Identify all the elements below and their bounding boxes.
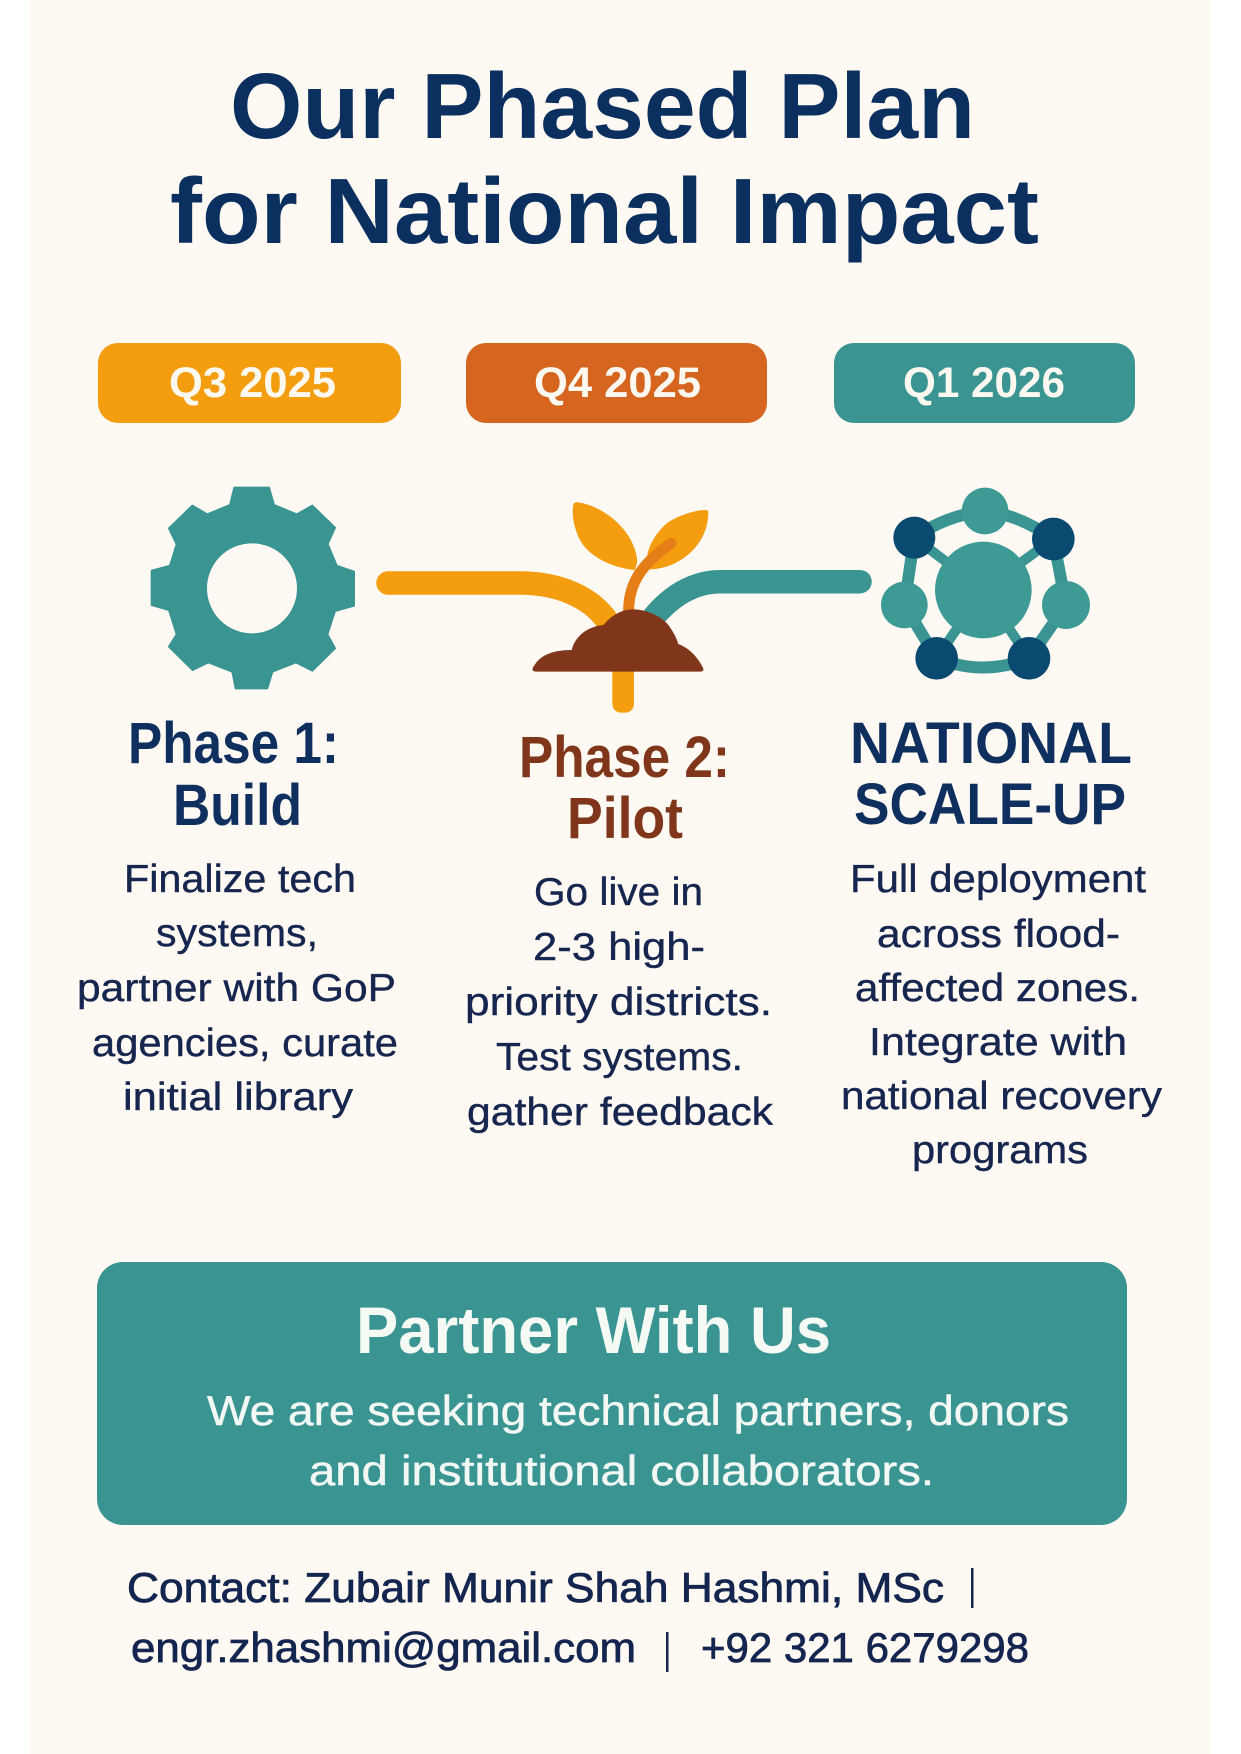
title: for National Impact [170,159,1039,263]
text: Phase 2 description: Go live in [534,871,703,914]
text: National scale-up description: affected zones. [855,967,1140,1010]
heading: Phase 2 Pilot: Phase 2: [519,725,730,790]
icon: gear [152,488,354,688]
badge: Q3 2025 [98,343,401,423]
text: Phase 2 description: gather feedback [467,1091,774,1134]
text: National scale-up description: programs [912,1129,1088,1172]
text: Phase 1 description: systems, [156,912,318,955]
text: Phase 2 description: Test systems. [496,1036,743,1079]
text: National scale-up description: Full deployment [850,858,1146,901]
text: Phase 1 description: initial library [123,1076,354,1119]
heading: Phase 1 Build [128,711,339,838]
heading: National Scale-up: NATIONAL [850,711,1132,776]
heading: Phase 1 Build: Build [173,773,302,838]
badge: Q1 2026 [834,343,1135,423]
text: Phase 2 description [465,871,774,1134]
text: Phase 1 description: agencies, curate [92,1022,398,1065]
heading: Phase 2 Pilot [519,725,730,851]
text: contact details: +92 321 6279298 [701,1624,1029,1671]
text: Phase 2 description: 2-3 high- [533,926,705,969]
text: Phase 1 description [77,858,398,1119]
text: contact details: Contact: Zubair Munir Shah Hashmi, MSc [127,1564,944,1611]
text: National scale-up description: Integrate with [869,1021,1127,1064]
text: partner message: and institutional collaborators. [309,1447,934,1494]
icon: network [881,488,1090,680]
text: partner message [207,1387,1069,1494]
arrow: teal connector from sprout to network [653,582,860,618]
heading: Phase 1 Build: Phase 1: [128,711,339,776]
badge: Q4 2025 [466,343,767,423]
text: National scale-up description: across flood- [877,913,1120,956]
panel: partner with us [97,1262,1127,1525]
badge: Q4 2025: Q4 2025 [534,359,701,407]
title: Our Phased Plan [230,54,975,158]
heading: partner with us: Partner With Us [356,1293,831,1367]
icon: sprout [532,502,708,713]
arrow: orange connector from gear to sprout [388,583,608,622]
text: partner message: We are seeking technical partners, donors [207,1387,1069,1434]
title [170,54,1039,263]
heading: National Scale-up [850,711,1132,837]
text: Phase 1 description: partner with GoP [77,967,396,1010]
text: National scale-up description [841,858,1163,1172]
heading: National Scale-up: SCALE-UP [854,772,1126,837]
text: contact details: engr.zhashmi@gmail.com [131,1624,636,1671]
text: Phase 2 description: priority districts. [465,981,772,1024]
text: National scale-up description: national recovery [841,1075,1163,1118]
heading: Phase 2 Pilot: Pilot [567,786,683,851]
text: Phase 1 description: Finalize tech [124,858,356,901]
text: contact details [127,1564,1029,1672]
badge: Q1 2026: Q1 2026 [903,359,1065,407]
badge: Q3 2025: Q3 2025 [169,359,336,407]
